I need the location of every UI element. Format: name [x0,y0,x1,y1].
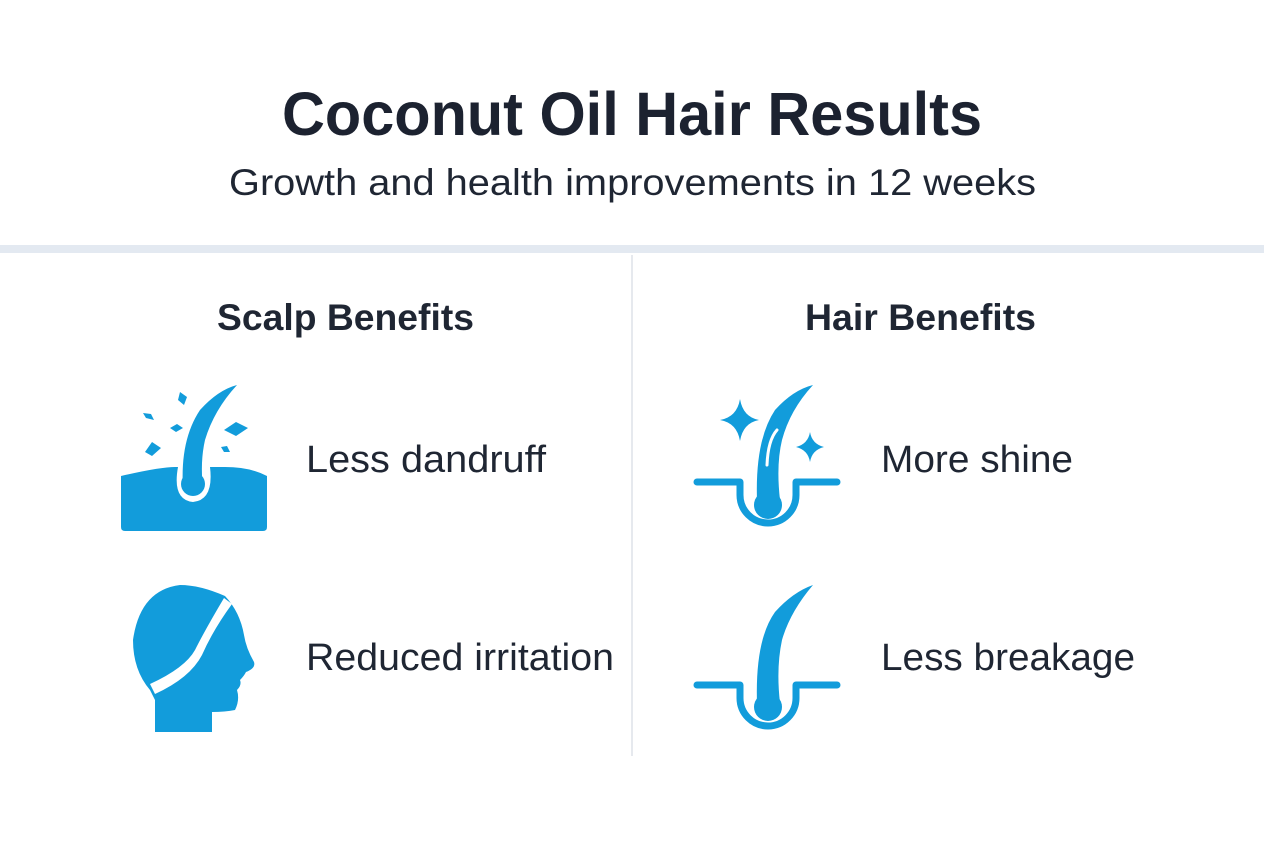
icon: scalp dandruff [121,385,267,531]
heading: hair benefits: Hair Benefits [805,297,1036,338]
label: less breakage: Less breakage [881,637,1135,679]
panel: scalp benefits [121,297,614,732]
icon: head [133,585,254,732]
icon: strong hair [697,585,837,726]
panel: hair benefits [697,297,1135,726]
label: less dandruff: Less dandruff [306,439,546,481]
heading: scalp benefits: Scalp Benefits [217,297,474,338]
subtitle: Growth and health improvements in 12 weeks [229,162,1036,203]
title: Coconut Oil Hair Results [282,80,982,148]
label: reduced irritation: Reduced irritation [306,637,614,679]
icon: shiny hair [697,385,837,523]
label: more shine: More shine [881,439,1073,481]
